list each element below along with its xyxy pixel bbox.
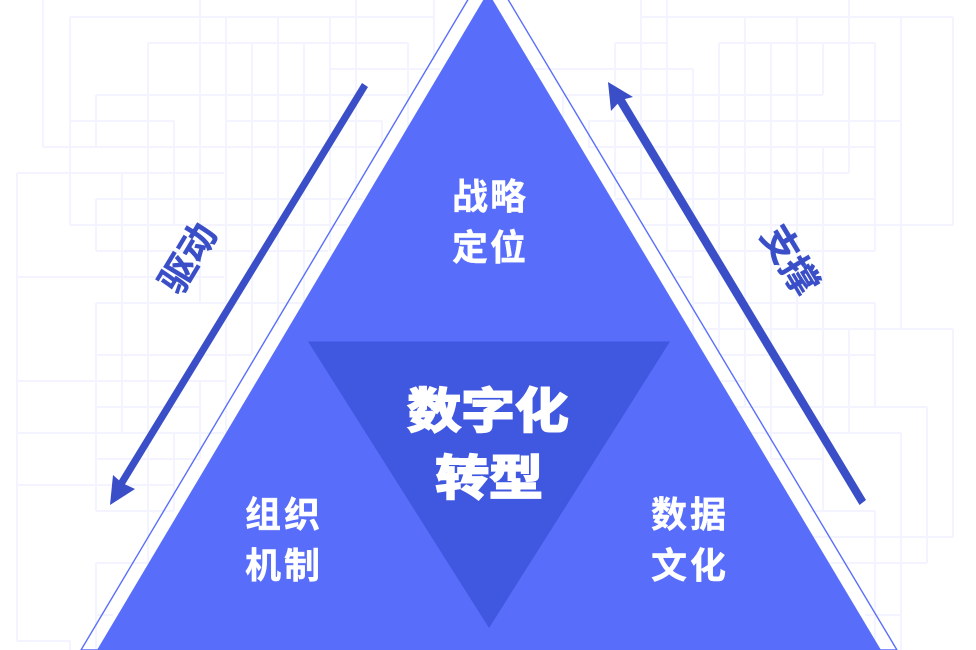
label: drive: 驱动 — [152, 216, 225, 301]
arrow: support, pointing up-left — [608, 82, 866, 505]
text: data culture — [651, 494, 729, 586]
arrow: drive, pointing down-left — [110, 83, 368, 505]
text: strategic positioning — [452, 176, 528, 268]
text: data culture: 文化 — [651, 545, 729, 586]
text: organizational mechanism: 机制 — [245, 545, 323, 586]
text: organizational mechanism — [245, 494, 323, 586]
text: strategic positioning: 定位 — [452, 227, 528, 268]
text: data culture: 数据 — [651, 494, 729, 535]
text: digital transformation: 转型 — [435, 451, 543, 505]
text: digital transformation: 数字化 — [407, 384, 569, 438]
inner inverted triangle — [308, 342, 670, 628]
label: support: 支撑 — [753, 218, 826, 303]
text: digital transformation — [407, 384, 569, 505]
text: organizational mechanism: 组织 — [245, 494, 323, 535]
text: strategic positioning: 战略 — [452, 176, 528, 217]
